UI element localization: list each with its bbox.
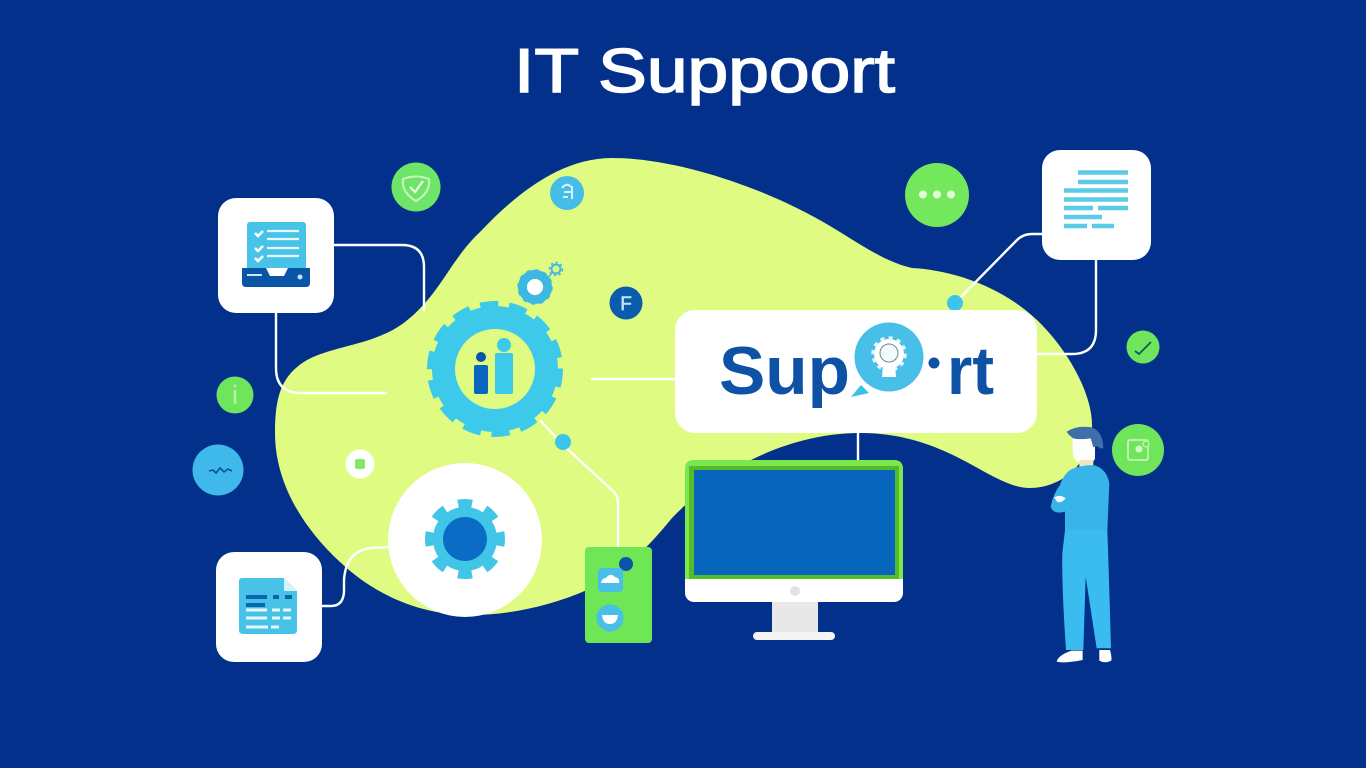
node dots bbox=[555, 295, 963, 450]
icon: green media badge bbox=[1112, 424, 1164, 476]
icon: green device bbox=[585, 547, 652, 643]
icon: pulse circle bbox=[192, 444, 244, 496]
text: sup: Sup bbox=[719, 333, 850, 409]
text: dot bbox=[928, 358, 940, 368]
icon: data sheet card bbox=[216, 552, 322, 662]
text: rt: rt bbox=[947, 333, 994, 409]
panel: support sign bbox=[675, 310, 1037, 433]
background blob bbox=[275, 158, 1092, 615]
icon: green shield check bbox=[392, 162, 440, 212]
icon: small gears bbox=[519, 262, 562, 303]
icon: chat dots bbox=[905, 163, 969, 227]
icon: small white badge bbox=[346, 450, 374, 478]
icon: large people gear bbox=[430, 304, 560, 434]
icon: F badge: F bbox=[620, 294, 632, 315]
icon: magnifier gear bbox=[851, 322, 924, 397]
icon: checklist tray card bbox=[218, 198, 334, 313]
person bbox=[1051, 427, 1111, 662]
title: IT Suppoort bbox=[514, 37, 895, 106]
icon: green info bbox=[216, 376, 254, 414]
connector lines bbox=[276, 234, 1096, 606]
icon: text document card bbox=[1042, 150, 1151, 260]
icon: white circle gear bbox=[388, 463, 542, 617]
icon: cyan glyph circle bbox=[550, 176, 584, 210]
icon: green check bbox=[1126, 330, 1160, 364]
icon: F badge bbox=[610, 286, 642, 320]
monitor bbox=[685, 460, 903, 640]
